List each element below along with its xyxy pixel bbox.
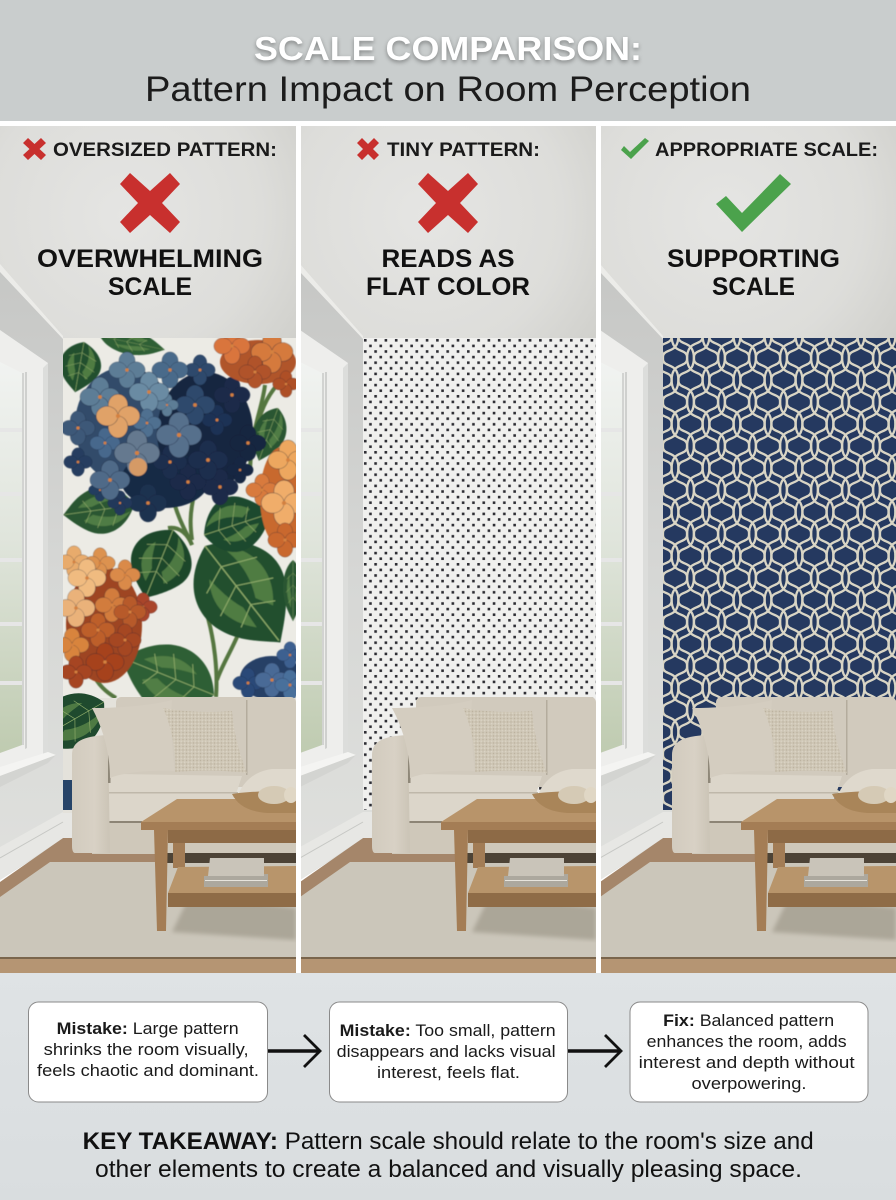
floral wallpaper (63, 338, 296, 813)
right orange hydrangea (245, 439, 296, 558)
key takeaway: KEY TAKEAWAY: Pattern scale should relate to the room's size and (83, 1128, 810, 1155)
panel label: OVERSIZED PATTERN: (53, 140, 277, 161)
callout: fix: Fix: Balanced pattern (663, 1011, 828, 1030)
bottom right blue hydrangea (232, 640, 296, 698)
verdict heading: OVERWHELMING (37, 245, 263, 273)
arrow (268, 1035, 320, 1067)
room scene (600, 126, 896, 973)
room scene (300, 126, 596, 973)
verdict heading: SCALE (712, 273, 795, 301)
icon: small red x (23, 138, 46, 160)
icon: large red x (120, 173, 180, 233)
footer band (0, 973, 896, 1200)
callout: fix: overpowering. (692, 1074, 806, 1093)
callout: fix (630, 1002, 868, 1102)
icon: large red x (418, 173, 478, 233)
key takeaway: other elements to create a balanced and visually pleasing space. (95, 1156, 802, 1183)
room furniture (72, 697, 298, 931)
subtitle: Pattern Impact on Room Perception (145, 70, 751, 109)
callout: fix: enhances the room, adds (647, 1032, 847, 1051)
top right orange hydrangea (213, 338, 296, 398)
verdict heading: SCALE (108, 273, 192, 301)
panel label: APPROPRIATE SCALE: (655, 140, 878, 161)
panel label: TINY PATTERN: (387, 140, 540, 161)
callout: fix: interest and depth without (639, 1053, 855, 1072)
callout: tiny mistake: Mistake: Too small, pattern (340, 1021, 549, 1040)
icon: large green check (716, 174, 791, 232)
leaves (63, 338, 296, 697)
callout: oversized mistake: shrinks the room visually, (44, 1040, 249, 1059)
room scene base (0, 126, 296, 973)
panel: appropriate scale (600, 126, 896, 973)
arrow (568, 1035, 621, 1067)
callout: tiny mistake: interest, feels flat. (377, 1063, 520, 1082)
callout: oversized mistake: Mistake: Large pattern (57, 1019, 234, 1038)
trellis wallpaper (663, 338, 896, 810)
icon: small green check (621, 138, 649, 159)
verdict heading: READS AS (382, 245, 514, 273)
panel: tiny pattern (300, 126, 598, 973)
verdict heading: SUPPORTING (667, 245, 840, 273)
large blue hydrangea (61, 352, 266, 522)
header band (0, 0, 896, 121)
tiny pattern labels (357, 138, 540, 301)
room furniture (672, 697, 896, 931)
appropriate scale labels (621, 138, 878, 301)
stems (92, 378, 283, 698)
callout: tiny mistake: disappears and lacks visual (337, 1042, 556, 1061)
panel: oversized pattern (0, 126, 317, 973)
title: SCALE COMPARISON: (254, 30, 642, 67)
panel dividers (296, 121, 601, 973)
callout: tiny mistake (330, 1002, 568, 1102)
callout: oversized mistake (28, 1002, 268, 1102)
icon: small red x (357, 138, 379, 160)
verdict heading: FLAT COLOR (366, 273, 530, 301)
room furniture (372, 697, 598, 931)
bottom left orange hydrangea (55, 546, 157, 688)
callout: oversized mistake: feels chaotic and dominant. (37, 1061, 259, 1080)
dotted wallpaper (363, 338, 596, 810)
